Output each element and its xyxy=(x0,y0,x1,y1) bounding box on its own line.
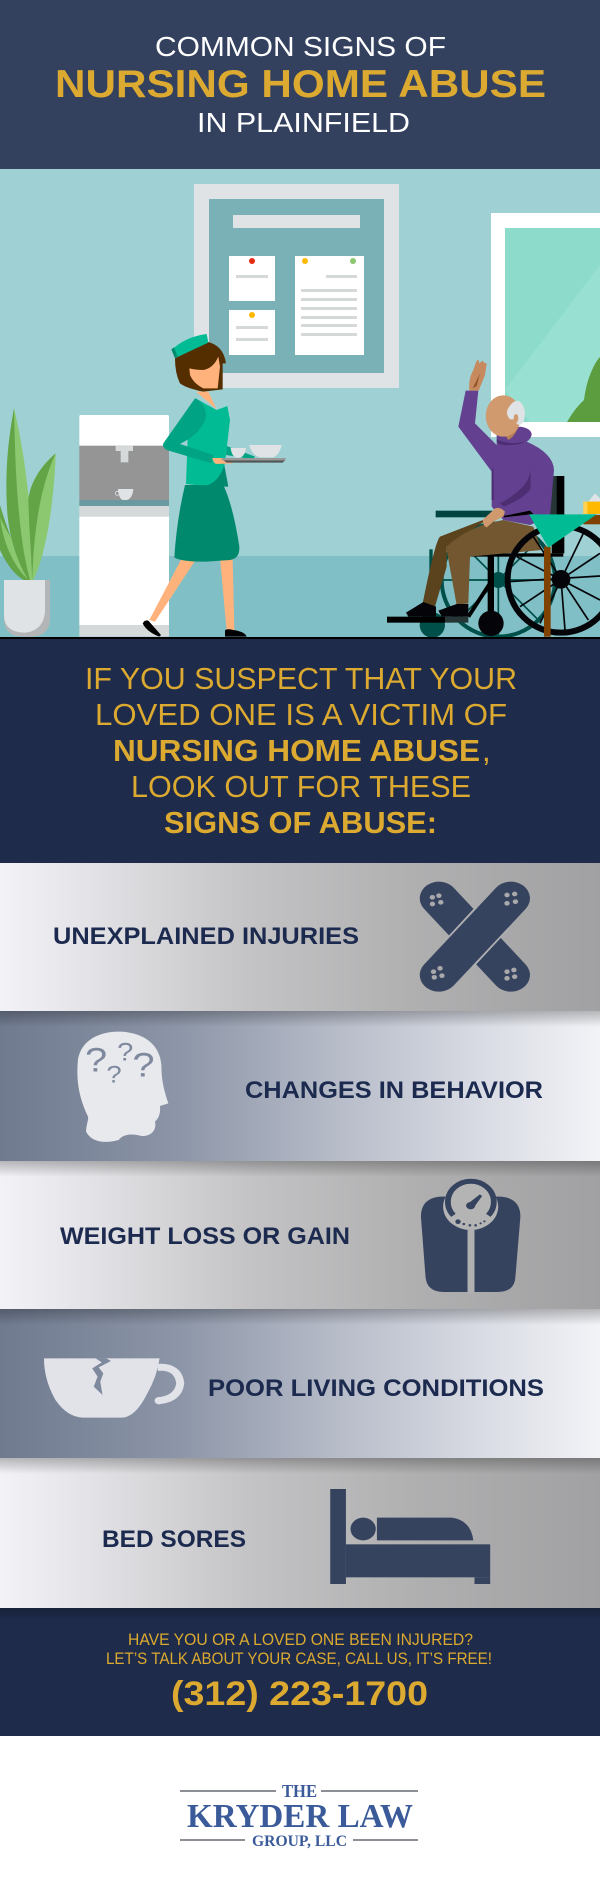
label: POOR LIVING CONDITIONS xyxy=(208,1375,544,1402)
title line: nursing home abuse: NURSING HOME ABUSE xyxy=(55,63,546,106)
sign 3: weight loss or gain xyxy=(0,1161,600,1309)
label: UNEXPLAINED INJURIES xyxy=(53,923,359,950)
icon: head with question marks: ? xyxy=(106,1062,122,1088)
intro line 2: LOVED ONE IS A VICTIM OF xyxy=(95,697,507,732)
icon: crossed bandages xyxy=(430,892,518,981)
notice board xyxy=(194,184,399,388)
front wheel xyxy=(508,526,600,633)
logo: the kryder law group: THE xyxy=(282,1781,317,1801)
icon: head with question marks: ? xyxy=(85,1040,107,1079)
nurse with tray xyxy=(143,334,286,637)
header panel xyxy=(0,0,600,169)
sign 4: poor living conditions xyxy=(0,1309,600,1458)
call to action panel xyxy=(0,1608,600,1736)
icon: person in bed xyxy=(330,1489,490,1584)
icon: bathroom scale xyxy=(421,1181,520,1293)
logo: the kryder law group: KRYDER LAW xyxy=(187,1798,413,1835)
cta line 1: HAVE YOU OR A LOVED ONE BEEN INJURED? xyxy=(128,1631,473,1649)
potted plant xyxy=(0,408,56,637)
label: BED SORES xyxy=(102,1526,246,1553)
icon: cracked cup xyxy=(44,1358,180,1418)
logo: the kryder law group xyxy=(0,1736,600,1895)
label: CHANGES IN BEHAVIOR xyxy=(245,1077,543,1104)
intro line 4: LOOK OUT FOR THESE xyxy=(131,769,471,804)
intro panel xyxy=(0,639,600,863)
man xyxy=(406,360,554,617)
sign 1: unexplained injuries xyxy=(0,863,600,1011)
sign 5: bed sores xyxy=(0,1458,600,1608)
water cooler xyxy=(79,415,169,637)
comma: , xyxy=(482,733,491,768)
wheelchair xyxy=(387,476,564,638)
logo: the kryder law group: GROUP, LLC xyxy=(252,1833,347,1850)
table with cloth and tissue box xyxy=(529,493,600,637)
elderly man in wheelchair xyxy=(387,360,600,638)
title line: common signs of: COMMON SIGNS OF xyxy=(155,31,446,62)
intro line 5 bold: SIGNS OF ABUSE: xyxy=(164,805,437,840)
intro line 1: IF YOU SUSPECT THAT YOUR xyxy=(85,661,517,696)
floor line xyxy=(0,637,600,640)
phone number: (312) 223-1700 xyxy=(171,1675,428,1713)
label: WEIGHT LOSS OR GAIN xyxy=(60,1223,350,1250)
sign 2: changes in behavior xyxy=(0,1011,600,1161)
water cooler and plant xyxy=(0,334,286,637)
title line: in plainfield: IN PLAINFIELD xyxy=(197,107,410,138)
window xyxy=(491,213,600,437)
icon: head with question marks xyxy=(77,1032,168,1142)
cta line 2: LET’S TALK ABOUT YOUR CASE, CALL US, IT’S FREE! xyxy=(106,1650,492,1668)
intro line 3 bold: NURSING HOME ABUSE xyxy=(113,733,480,768)
illustration: nursing home room xyxy=(0,169,600,638)
icon: head with question marks: ? xyxy=(132,1045,155,1084)
icon: head with question marks: ? xyxy=(117,1037,133,1066)
